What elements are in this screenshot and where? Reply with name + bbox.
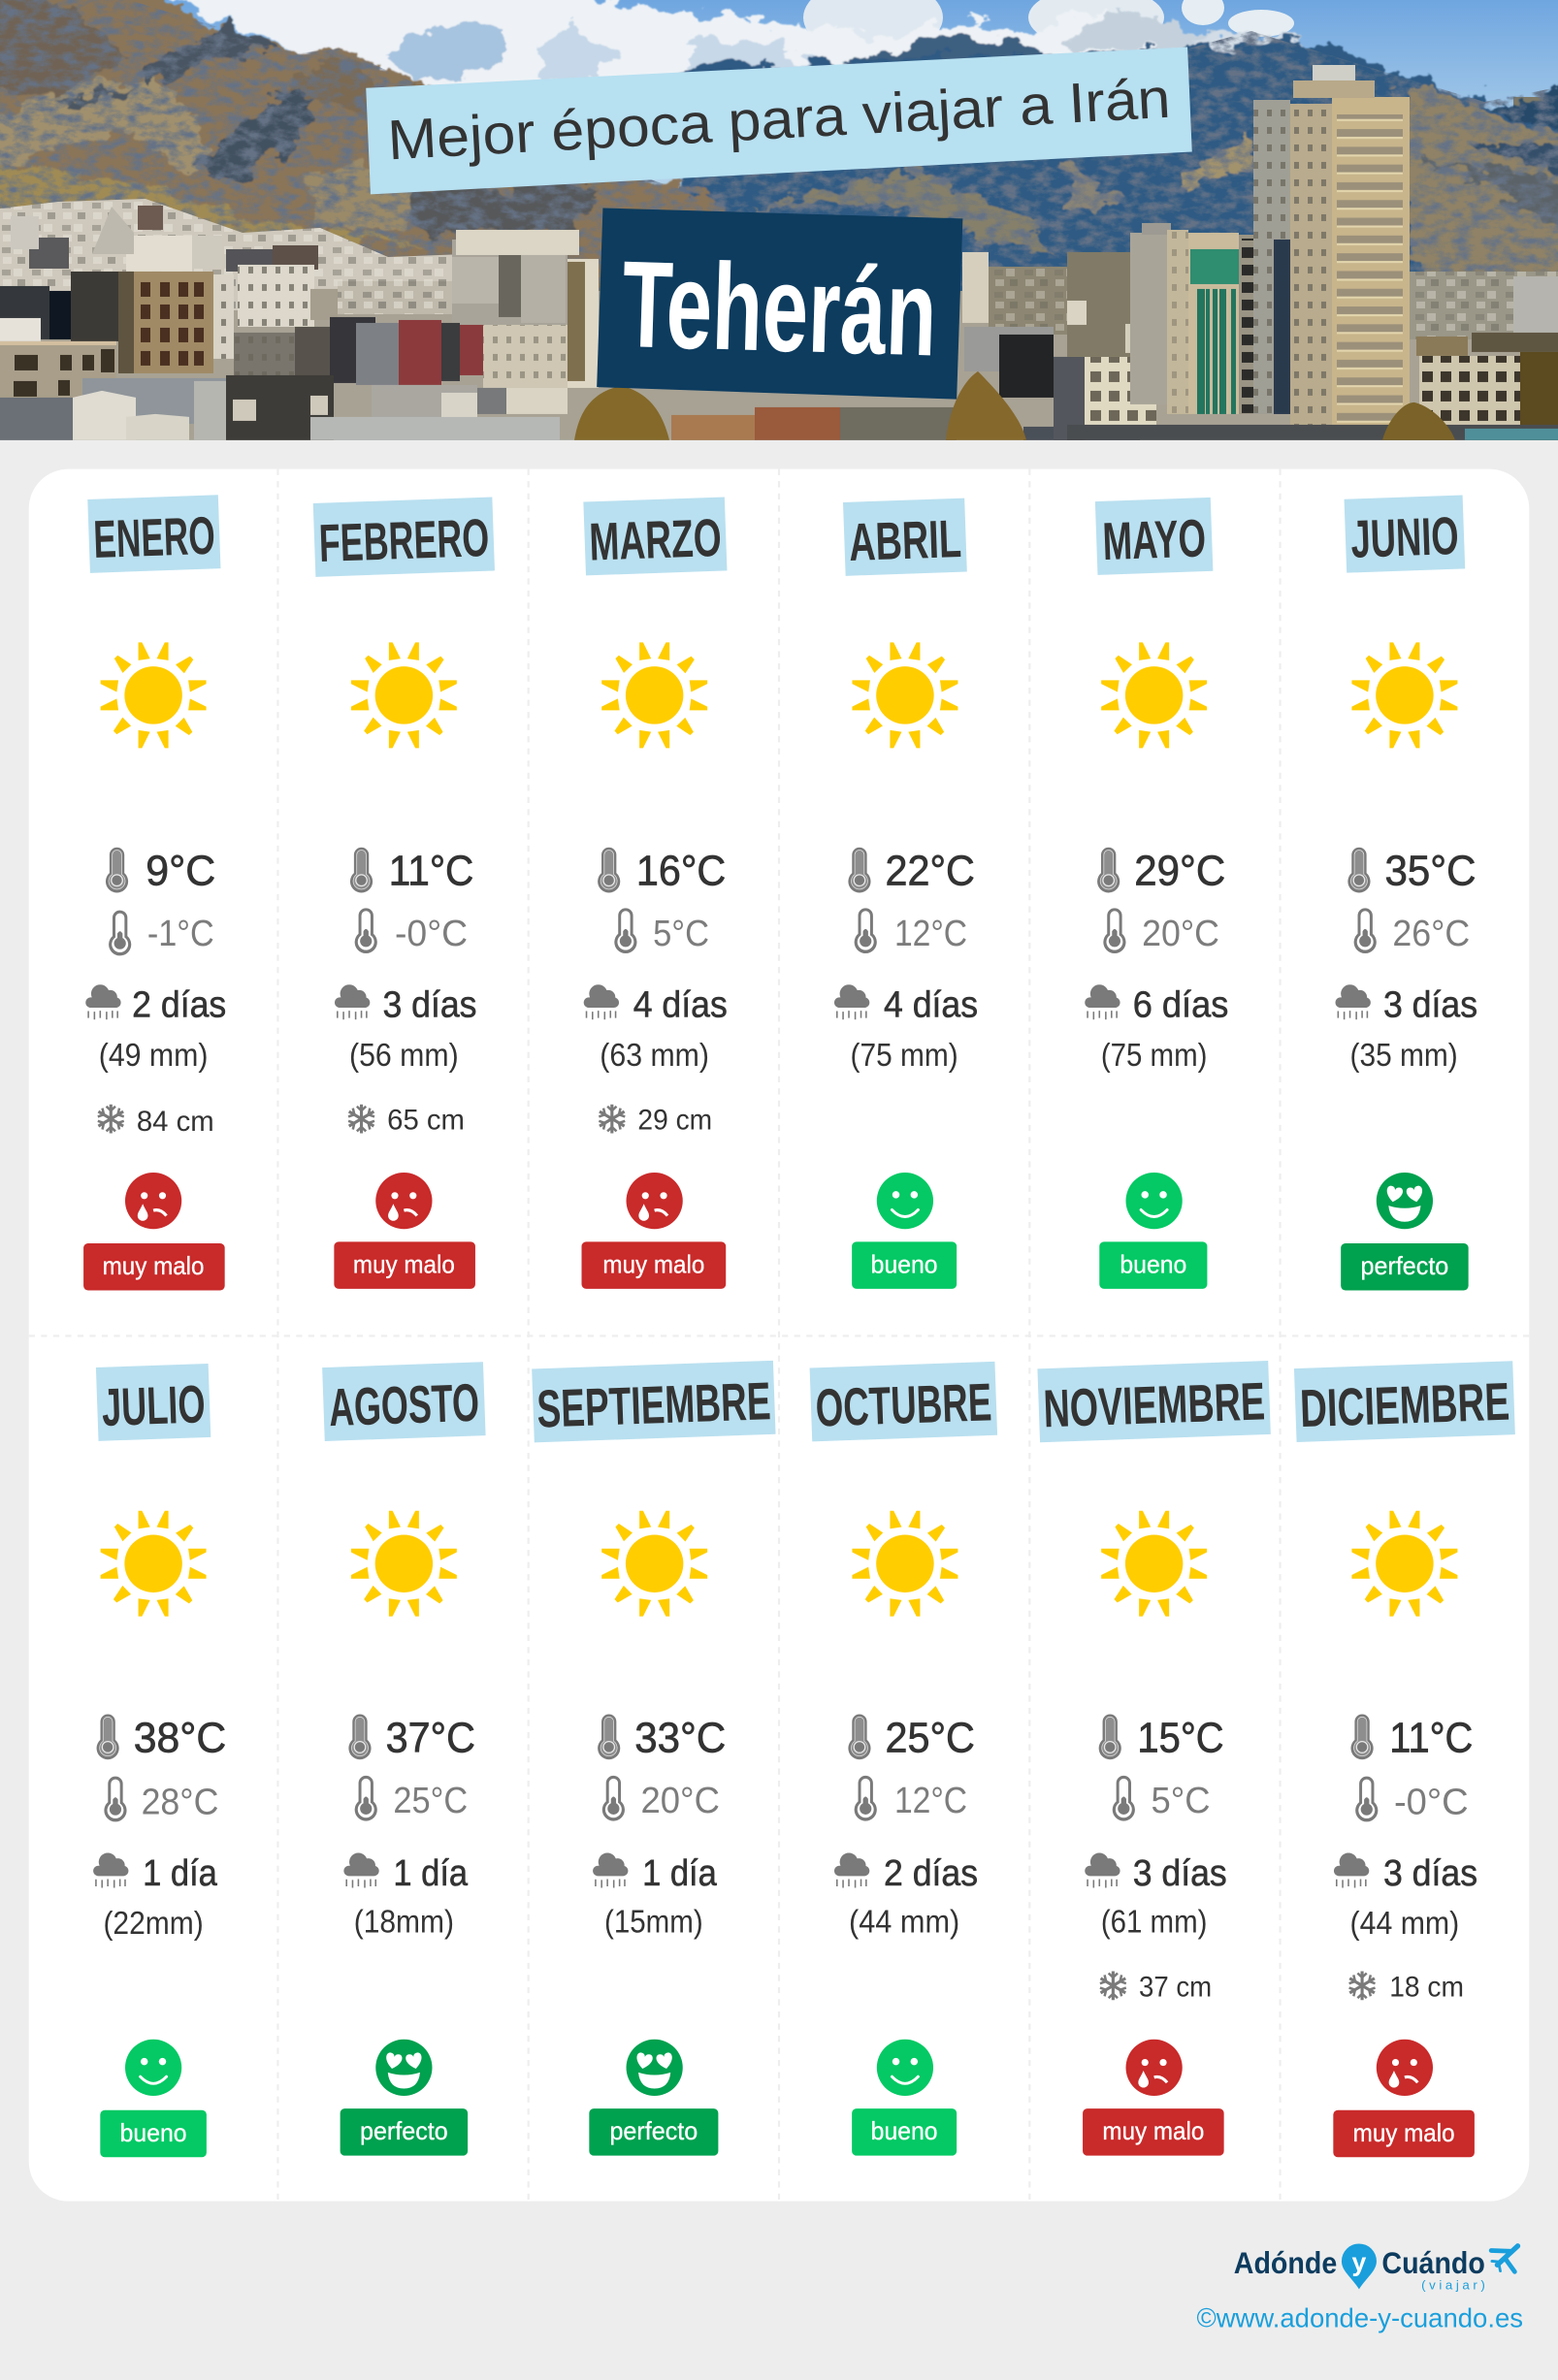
icon: thermometer high <box>106 848 128 892</box>
rating badge <box>341 2108 468 2156</box>
icon: airplane <box>1491 2246 1518 2271</box>
min temperature: 5°C <box>653 913 709 953</box>
icon: snowflake <box>1349 1971 1376 2000</box>
month label: Julio: JULIO <box>101 1373 206 1437</box>
icon: sun <box>351 642 457 748</box>
rating badge <box>1333 2110 1475 2157</box>
icon: sad face <box>125 1173 181 1229</box>
icon: sun <box>601 642 707 748</box>
rating badge <box>589 2108 718 2156</box>
min temperature: 26°C <box>1392 913 1470 953</box>
subtitle banner: Mejor época para viajar a Irán: Mejor época para viajar a Irán <box>386 68 1172 172</box>
month label: Enero: ENERO <box>92 505 216 569</box>
rating badge: bueno <box>871 1251 938 1278</box>
month label: Marzo <box>583 497 727 575</box>
icon: thermometer high <box>598 848 620 892</box>
icon: sun <box>1101 1511 1207 1617</box>
icon: rain cloud <box>1336 984 1371 1019</box>
icon: thermometer low <box>614 908 636 953</box>
rain days: 1 día <box>143 1852 217 1893</box>
rainfall: (15mm) <box>604 1904 703 1940</box>
month label: Octubre: OCTUBRE <box>815 1371 992 1438</box>
icon: thermometer high <box>97 1714 119 1759</box>
max temperature: 37°C <box>386 1714 475 1761</box>
icon: map pin with y <box>1342 2243 1377 2289</box>
column: Febrero <box>313 498 495 1289</box>
icon: thermometer low <box>355 908 377 953</box>
rating badge <box>852 2108 957 2156</box>
column: Junio <box>1336 496 1477 1290</box>
rain days: 3 días <box>382 984 477 1025</box>
icon: heart-eyes face <box>627 2040 683 2096</box>
icon: happy face <box>877 2040 933 2096</box>
logo tagline: (viajar) <box>1421 2277 1485 2292</box>
icon: snowflake <box>1100 1971 1126 2000</box>
month label: Noviembre <box>1037 1361 1271 1442</box>
column: Enero <box>83 495 226 1290</box>
rating badge <box>582 1241 726 1289</box>
rain days: 4 días <box>884 984 978 1025</box>
icon: rain cloud <box>1085 1853 1120 1888</box>
month label: Junio: JUNIO <box>1349 505 1460 569</box>
month label: Agosto <box>322 1362 486 1441</box>
icon: thermometer low <box>104 1777 127 1821</box>
rain days: 1 día <box>642 1852 717 1893</box>
column: Septiembre <box>532 1361 776 2156</box>
icon: sun <box>1351 1511 1457 1617</box>
icon: sad face <box>1377 2040 1433 2096</box>
icon: thermometer low <box>1103 908 1126 953</box>
photo: Tehran skyline with mountains <box>0 0 1558 440</box>
icon: thermometer high <box>848 1714 871 1759</box>
icon: map pin with y: y <box>1352 2248 1367 2277</box>
rainfall: (35 mm) <box>1350 1037 1458 1073</box>
rain days: 3 días <box>1383 984 1477 1025</box>
rating badge: perfecto <box>609 2118 698 2145</box>
icon: rain cloud <box>834 1853 869 1888</box>
logo word: Cuándo: Cuándo <box>1381 2246 1485 2280</box>
min temperature: 5°C <box>1151 1780 1211 1820</box>
max temperature: 15°C <box>1137 1714 1224 1761</box>
column: Octubre <box>810 1362 997 2156</box>
rain days: 3 días <box>1133 1852 1227 1893</box>
icon: heart-eyes face <box>1377 1173 1433 1229</box>
month label: Febrero: FEBRERO <box>318 507 490 573</box>
snowfall: 84 cm <box>137 1106 214 1138</box>
snowfall: 37 cm <box>1139 1971 1212 2003</box>
rating badge: bueno <box>871 2118 938 2145</box>
rainfall: (22mm) <box>103 1905 204 1941</box>
rating badge: perfecto <box>1361 1253 1448 1280</box>
icon: thermometer high <box>1347 848 1371 892</box>
icon: sad face <box>375 1173 432 1229</box>
month label: Mayo <box>1095 498 1213 575</box>
icon: thermometer high <box>1099 1714 1121 1759</box>
icon: rain cloud <box>1334 1853 1369 1888</box>
icon: thermometer low <box>855 908 877 953</box>
min temperature: 12°C <box>894 1780 967 1820</box>
column: Julio <box>93 1364 226 2157</box>
min temperature: 25°C <box>393 1780 468 1820</box>
rating badge: bueno <box>120 2120 187 2147</box>
min temperature: -0°C <box>395 913 468 953</box>
max temperature: 29°C <box>1134 848 1225 895</box>
rainfall: (63 mm) <box>600 1037 709 1073</box>
icon: happy face <box>125 2040 181 2096</box>
max temperature: 35°C <box>1385 848 1476 895</box>
snowfall: 18 cm <box>1389 1971 1464 2003</box>
rain days: 2 días <box>884 1852 978 1893</box>
icon: thermometer low <box>355 1776 377 1821</box>
icon: sun <box>852 1511 958 1617</box>
icon: thermometer low <box>109 911 131 955</box>
rating badge: perfecto <box>360 2118 448 2145</box>
rain days: 3 días <box>1383 1852 1477 1893</box>
rating badge: muy malo <box>602 1251 704 1278</box>
icon: sad face <box>1126 2040 1183 2096</box>
rating badge: muy malo <box>353 1251 455 1278</box>
icon: thermometer low <box>1355 1777 1378 1821</box>
month label: Abril: ABRIL <box>848 508 962 572</box>
icon: heart-eyes face <box>375 2040 432 2096</box>
rainfall: (49 mm) <box>99 1037 208 1073</box>
logo word: Adónde: Adónde <box>1234 2246 1337 2280</box>
rain days: 2 días <box>132 984 226 1025</box>
icon: sun <box>351 1511 457 1617</box>
max temperature: 33°C <box>634 1714 726 1761</box>
icon: rain cloud <box>584 984 619 1019</box>
max temperature: 25°C <box>886 1714 975 1761</box>
icon: thermometer low <box>1354 908 1377 953</box>
min temperature: 20°C <box>641 1780 720 1820</box>
icon: snowflake <box>348 1105 374 1133</box>
rating badge <box>100 2110 207 2157</box>
min temperature: -1°C <box>147 913 214 953</box>
column: Diciembre <box>1294 1361 1515 2157</box>
max temperature: 38°C <box>134 1714 226 1761</box>
icon: thermometer low <box>1113 1776 1135 1821</box>
rainfall: (56 mm) <box>349 1037 459 1073</box>
icon: sun <box>1101 642 1207 748</box>
icon: thermometer high <box>1097 848 1120 892</box>
min temperature: -0°C <box>1394 1781 1469 1821</box>
month label: Julio <box>96 1364 211 1441</box>
max temperature: 11°C <box>389 848 473 895</box>
rating badge <box>1099 1241 1207 1289</box>
rainfall: (75 mm) <box>1101 1037 1207 1073</box>
icon: sun <box>101 1511 207 1617</box>
icon: rain cloud <box>85 984 121 1019</box>
column: Mayo <box>1085 498 1228 1289</box>
column: Noviembre <box>1037 1361 1271 2156</box>
month label: Enero <box>87 495 220 573</box>
title banner: Teherán <box>597 208 962 400</box>
icon: thermometer high <box>598 1714 620 1759</box>
rating badge <box>852 1241 957 1289</box>
month label: Octubre <box>810 1362 997 1441</box>
icon: rain cloud <box>335 984 370 1019</box>
icon: rain cloud <box>1085 984 1120 1019</box>
max temperature: 16°C <box>636 848 726 895</box>
min temperature: 28°C <box>142 1781 218 1821</box>
rain days: 1 día <box>393 1852 468 1893</box>
column: Abril <box>834 499 978 1289</box>
month label: Abril <box>843 499 967 576</box>
panel: calendar card <box>29 469 1529 2202</box>
month label: Mayo: MAYO <box>1101 507 1207 571</box>
subtitle banner: Mejor época para viajar a Irán <box>366 48 1192 194</box>
icon: thermometer low <box>855 1776 877 1821</box>
min temperature: 20°C <box>1142 913 1219 953</box>
icon: rain cloud <box>93 1853 128 1888</box>
rain days: 4 días <box>633 984 728 1025</box>
max temperature: 11°C <box>1389 1714 1473 1761</box>
month label: Noviembre: NOVIEMBRE <box>1042 1370 1266 1438</box>
rating badge: muy malo <box>103 1253 205 1280</box>
icon: thermometer high <box>348 1714 372 1759</box>
rating badge <box>334 1241 475 1289</box>
max temperature: 22°C <box>886 848 975 895</box>
icon: snowflake <box>599 1105 625 1133</box>
rainfall: (18mm) <box>354 1904 454 1940</box>
month label: Junio <box>1345 496 1465 573</box>
rainfall: (61 mm) <box>1101 1904 1207 1940</box>
icon: sun <box>852 642 958 748</box>
rating badge: muy malo <box>1353 2120 1455 2147</box>
month label: Febrero <box>313 498 495 577</box>
icon: snowflake <box>98 1105 124 1133</box>
icon: thermometer high <box>848 848 871 892</box>
rating badge <box>1083 2108 1224 2156</box>
icon: thermometer high <box>1350 1714 1374 1759</box>
icon: thermometer high <box>350 848 373 892</box>
snowfall: 65 cm <box>387 1105 465 1137</box>
rainfall: (44 mm) <box>1350 1905 1459 1941</box>
month label: Septiembre: SEPTIEMBRE <box>536 1370 772 1439</box>
icon: rain cloud <box>834 984 869 1019</box>
month label: Agosto: AGOSTO <box>328 1372 480 1437</box>
logo: Adónde y Cuándo viajar <box>1234 2243 1518 2292</box>
rainfall: (75 mm) <box>851 1037 958 1073</box>
rain days: 6 días <box>1133 984 1228 1025</box>
snowfall: 29 cm <box>637 1105 712 1137</box>
max temperature: 9°C <box>146 848 215 895</box>
min temperature: 12°C <box>894 913 967 953</box>
rating badge: muy malo <box>1102 2118 1204 2145</box>
icon: rain cloud <box>343 1853 379 1888</box>
icon: sun <box>1351 642 1457 748</box>
source url: ©www.adonde-y-cuando.es <box>1196 2303 1523 2333</box>
icon: happy face <box>877 1173 933 1229</box>
icon: thermometer low <box>602 1776 625 1821</box>
icon: sad face <box>627 1173 683 1229</box>
rating badge <box>1341 1243 1469 1290</box>
icon: rain cloud <box>593 1853 628 1888</box>
rainfall: (44 mm) <box>849 1904 959 1940</box>
column: Agosto <box>322 1362 486 2156</box>
title banner: Teherán: Teherán <box>620 235 938 381</box>
month label: Marzo: MARZO <box>588 507 723 572</box>
rating badge: bueno <box>1120 1251 1186 1278</box>
icon: sun <box>601 1511 707 1617</box>
icon: sun <box>101 642 207 748</box>
icon: happy face <box>1126 1173 1183 1229</box>
month label: Septiembre <box>532 1361 776 1442</box>
column: Marzo <box>582 497 728 1289</box>
rating badge <box>83 1243 225 1290</box>
